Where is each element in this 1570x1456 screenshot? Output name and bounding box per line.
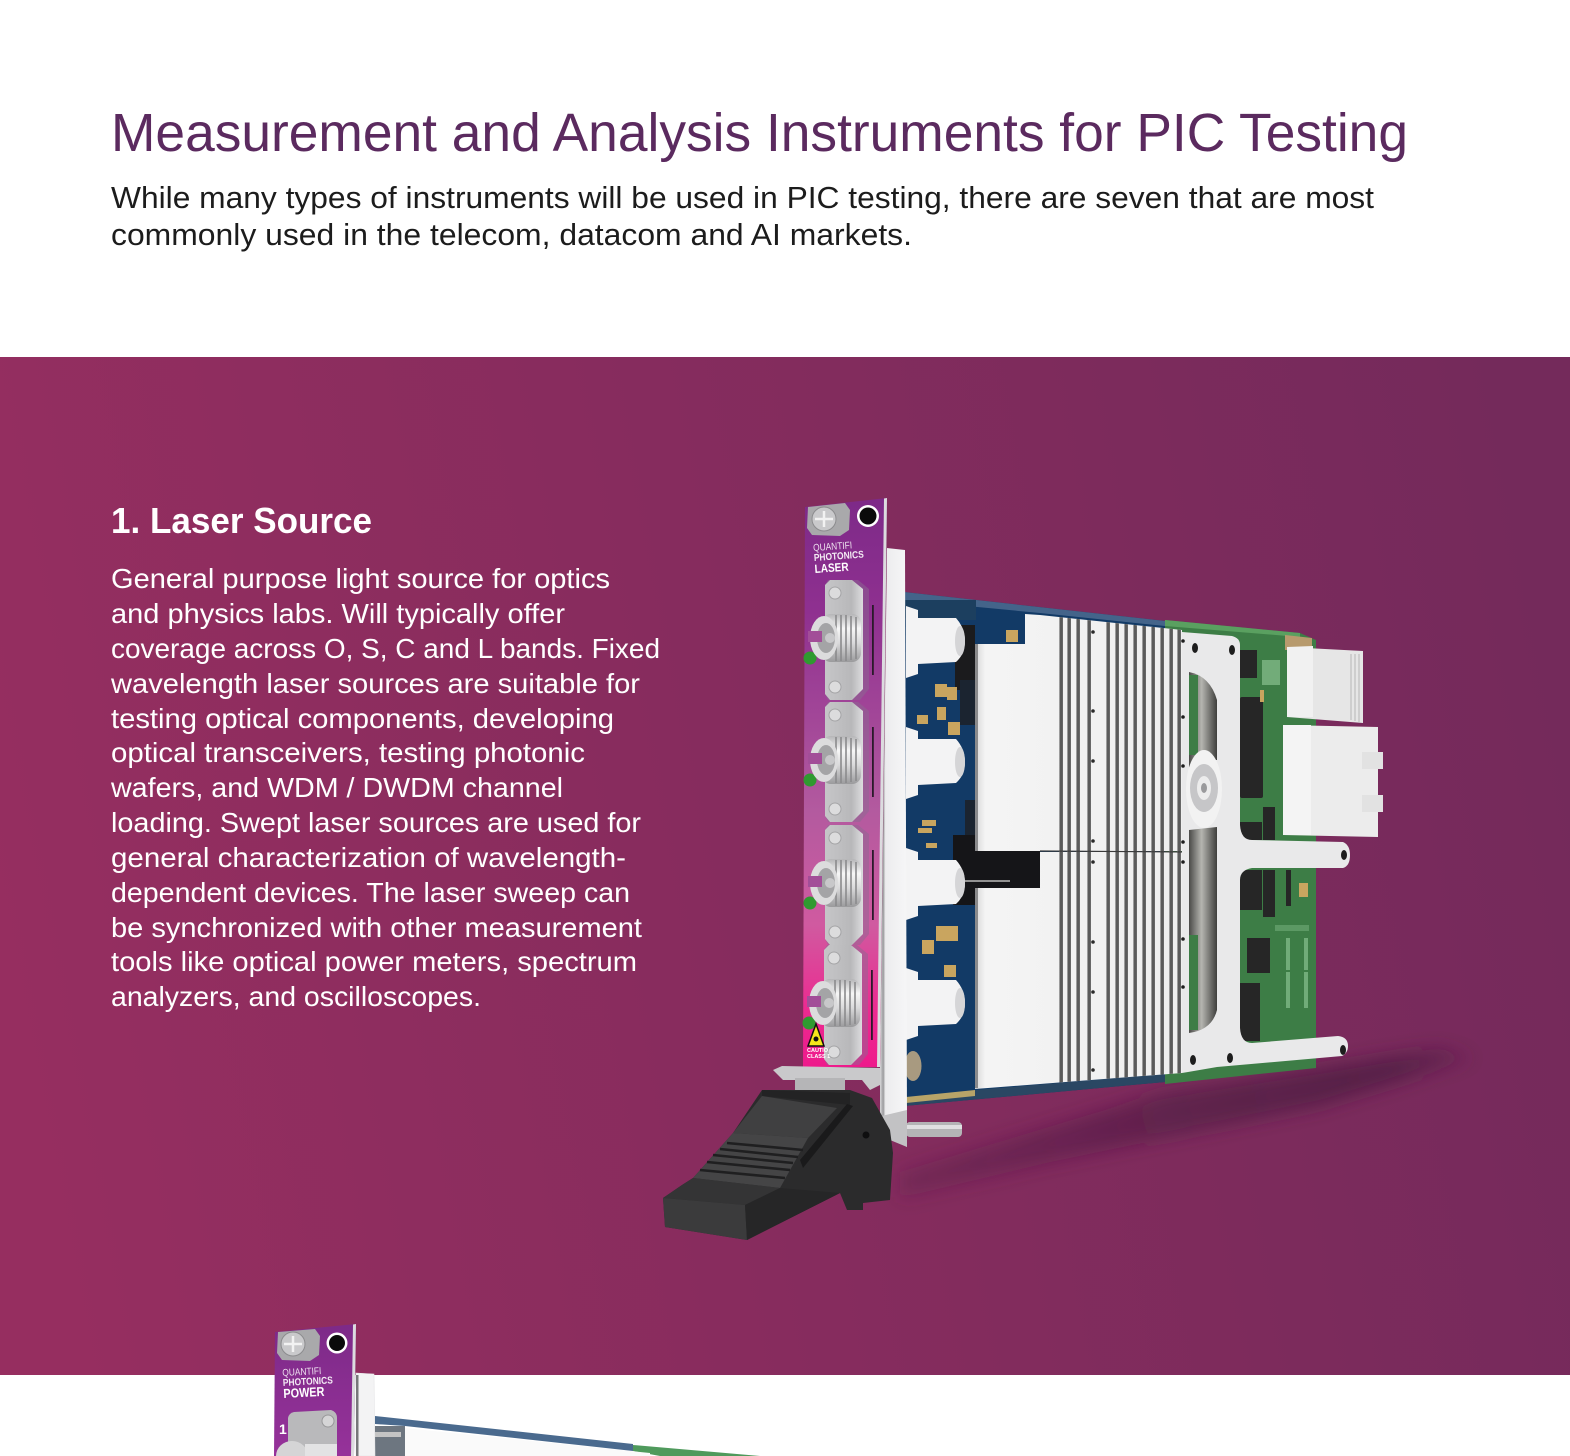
laser source description: testing optical components, developing [111, 703, 614, 734]
mounting screw [277, 1329, 320, 1361]
laser warning label: CAUTIO [807, 1048, 829, 1054]
laser source description: wafers, and WDM / DWDM channel [110, 772, 563, 803]
laser module illustration [663, 498, 1475, 1240]
faceplate label [282, 1365, 334, 1401]
gold components [917, 630, 1018, 977]
faceplate label: PHOTONICS [283, 1375, 333, 1389]
heat sink with fins [975, 610, 1190, 1090]
laser source description: general characterization of wavelength- [111, 842, 626, 873]
faceplate [802, 498, 887, 1067]
floor shadow [900, 1048, 1475, 1198]
laser source description: General purpose light source for optics [111, 563, 610, 594]
side rail [356, 1373, 375, 1456]
laser warning label [807, 1024, 830, 1060]
laser source description: tools like optical power meters, spectrum [111, 946, 637, 977]
circuit board: blue section [904, 592, 1165, 1106]
laser source description: coverage across O, S, C and L bands. Fixed [111, 633, 660, 664]
laser source description: loading. Swept laser sources are used for [111, 807, 641, 838]
title: Measurement and Analysis Instruments for PIC Testing [111, 103, 1408, 163]
laser source description: and physics labs. Will typically offer [111, 598, 565, 629]
laser source description [110, 563, 660, 1012]
intro text [111, 180, 1374, 252]
ejector handle [663, 1066, 893, 1240]
laser source description: be synchronized with other measurement [111, 912, 642, 943]
laser source description: optical transceivers, testing photonic [111, 737, 585, 768]
faceplate label: QUANTIFI [282, 1366, 322, 1379]
board and heat sink top edge [375, 1416, 633, 1456]
intro text: commonly used in the telecom, datacom and AI markets. [111, 217, 912, 252]
hole [326, 1332, 348, 1354]
white connectors [1283, 646, 1383, 837]
ejector pin [906, 1122, 962, 1137]
intro text: While many types of instruments will be used in PIC testing, there are seven that are most [111, 180, 1374, 215]
faceplate [274, 1324, 356, 1456]
fibre connectors [802, 580, 874, 1065]
faceplate label: POWER [283, 1384, 325, 1401]
background band [0, 357, 1570, 1375]
faceplate label: PHOTONICS [814, 550, 864, 564]
aluminium bracket [1181, 632, 1350, 1073]
faceplate label [813, 540, 865, 576]
faceplate label: LASER [814, 560, 849, 576]
laser source description: wavelength laser sources are suitable for [110, 668, 640, 699]
mounting screw [807, 503, 850, 536]
hole [857, 505, 879, 527]
side rail [877, 548, 907, 1147]
connector plate [276, 1410, 337, 1456]
laser source description: analyzers, and oscilloscopes. [111, 981, 481, 1012]
laser warning label: CLASS 1 [807, 1054, 830, 1060]
laser source description: dependent devices. The laser sweep can [111, 877, 630, 908]
faceplate label: QUANTIFI [813, 540, 852, 554]
electrolytic capacitor [904, 1051, 922, 1081]
section heading: 1. Laser Source: 1. Laser Source [111, 500, 372, 541]
second module: power meter (cropped) [274, 1324, 760, 1456]
fibre port blocks [906, 606, 1010, 1040]
channel number: 1 [279, 1421, 287, 1437]
circuit board: green section [1165, 620, 1316, 1084]
